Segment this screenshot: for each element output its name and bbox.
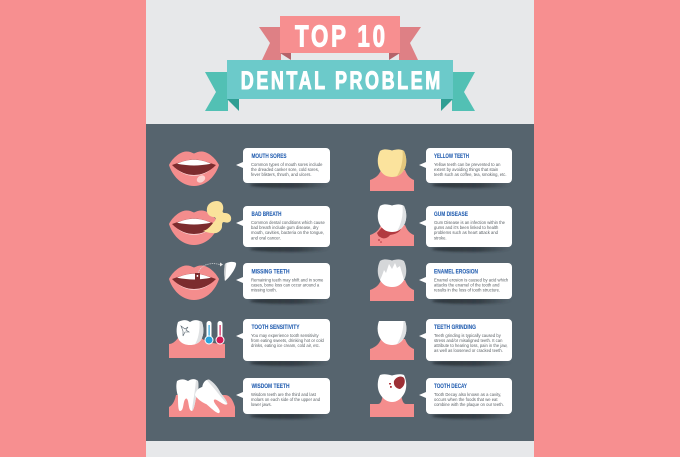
heading: ENAMEL EROSION bbox=[434, 270, 478, 276]
description: mouth, cavities, bacteria on the tongue, bbox=[251, 230, 324, 235]
card: yellow teeth bbox=[419, 148, 512, 188]
description: Common types of mouth sores include bbox=[251, 162, 323, 167]
teal ribbon tails bbox=[205, 72, 475, 111]
description: Tooth Decay also known as a cavity, bbox=[434, 392, 501, 397]
heading: GUM DISEASE bbox=[434, 212, 468, 218]
description: Teeth grinding is typically caused by bbox=[434, 333, 502, 338]
item: gum disease icon bbox=[370, 204, 414, 246]
item: yellow tooth icon bbox=[370, 149, 414, 191]
description: missing tooth. bbox=[251, 288, 277, 292]
panel: dark content background bbox=[146, 124, 534, 441]
item: bad breath icon bbox=[169, 201, 231, 245]
card: wisdom teeth bbox=[236, 378, 330, 419]
description: stroke. bbox=[434, 236, 447, 240]
item: missing teeth icon bbox=[169, 262, 236, 300]
panel: header background bbox=[146, 0, 534, 457]
impacted tooth bbox=[193, 378, 232, 416]
gum bbox=[169, 338, 225, 358]
description: combine with the plaque on our teeth. bbox=[434, 402, 504, 407]
description: bad breath include gum disease, dry bbox=[251, 225, 319, 230]
card: gum disease bbox=[419, 206, 512, 252]
description: teeth such as coffee, tea, smoking, etc. bbox=[434, 172, 507, 177]
card: tooth decay bbox=[419, 378, 512, 419]
cold thermometer bbox=[205, 321, 213, 344]
top ribbon face bbox=[280, 16, 400, 53]
description: cases, bone loss can occur around a bbox=[251, 282, 320, 288]
item: teeth grinding icon bbox=[370, 321, 414, 360]
card: teeth grinding bbox=[419, 319, 512, 366]
description: molars on each side of the upper and bbox=[251, 397, 321, 402]
card: tooth sensitivity bbox=[236, 319, 330, 366]
tooth bbox=[177, 320, 203, 345]
heading: TOOTH SENSITIVITY bbox=[252, 325, 300, 331]
teal ribbon folds bbox=[227, 99, 453, 111]
heading: dental problem: DENTAL PROBLEM bbox=[241, 66, 440, 95]
description: problems such as heart attack and bbox=[434, 230, 499, 235]
description: Common dental conditions which cause bbox=[251, 220, 325, 225]
heading: MOUTH SORES bbox=[252, 154, 286, 160]
description: lower jaws. bbox=[251, 402, 272, 407]
top ribbon tails bbox=[259, 27, 421, 60]
bad breath cloud bbox=[203, 201, 231, 233]
description: extent by avoiding things that stain bbox=[434, 167, 499, 172]
description: attribute to hearing loss, pain in the jaw, bbox=[434, 343, 508, 348]
description: from eating sweets, drinking hot or cold bbox=[251, 338, 325, 343]
card: mouth sores bbox=[236, 148, 330, 188]
item: tooth sensitivity icon bbox=[169, 320, 225, 358]
description: the dreaded canker sore, cold sores, bbox=[251, 167, 319, 172]
description: Remaining teeth may shift and in some bbox=[251, 278, 324, 282]
item: enamel erosion icon bbox=[370, 259, 414, 301]
title banner bbox=[205, 16, 475, 111]
lost tooth bbox=[224, 262, 236, 281]
heading: top 10: TOP 10 bbox=[295, 19, 385, 53]
card: enamel erosion bbox=[419, 263, 512, 304]
heading: YELLOW TEETH bbox=[434, 154, 469, 160]
gum bbox=[169, 395, 235, 417]
dashed arrow bbox=[198, 264, 220, 273]
description: Gum Disease is an infection within the bbox=[434, 220, 506, 225]
molar bbox=[176, 379, 198, 411]
heading: TEETH GRINDING bbox=[434, 325, 476, 331]
nerve crack mark bbox=[181, 326, 189, 336]
decay spot bbox=[394, 377, 405, 389]
heading: MISSING TEETH bbox=[252, 270, 290, 276]
description: Yellow teeth can be prevented to an bbox=[434, 162, 501, 167]
item: mouth sores icon bbox=[169, 151, 219, 186]
description: drinks, eating ice cream, cold air, etc. bbox=[251, 343, 320, 348]
item: wisdom teeth icon bbox=[169, 378, 235, 417]
description: You may experience tooth sensitivity bbox=[251, 333, 319, 338]
card: bad breath bbox=[236, 206, 330, 252]
description: stress and/or misaligned teeth. It can bbox=[434, 338, 503, 343]
description: and oral cancer. bbox=[251, 236, 281, 240]
item: tooth decay icon bbox=[370, 374, 414, 417]
description: Wisdom teeth are the third and last bbox=[251, 392, 317, 397]
teal ribbon face bbox=[227, 60, 453, 99]
description: occurs when the foods that we eat bbox=[434, 397, 498, 402]
card: missing teeth bbox=[236, 263, 330, 304]
description: fever blisters, thrush, and ulcers. bbox=[251, 172, 312, 177]
heading: BAD BREATH bbox=[252, 212, 282, 218]
description: attacks the enamel of the tooth and bbox=[434, 282, 500, 288]
description: gums and it's been linked to health bbox=[434, 225, 499, 230]
description: as well as loosened or cracked teeth. bbox=[434, 348, 503, 353]
description: Enamel erosion is caused by acid which bbox=[434, 278, 509, 282]
heading: WISDOM TEETH bbox=[252, 384, 290, 390]
heading: TOOTH DECAY bbox=[434, 384, 467, 390]
description: results in the loss of tooth structure. bbox=[434, 288, 500, 292]
top ribbon folds bbox=[280, 53, 400, 60]
hot thermometer bbox=[216, 321, 224, 344]
